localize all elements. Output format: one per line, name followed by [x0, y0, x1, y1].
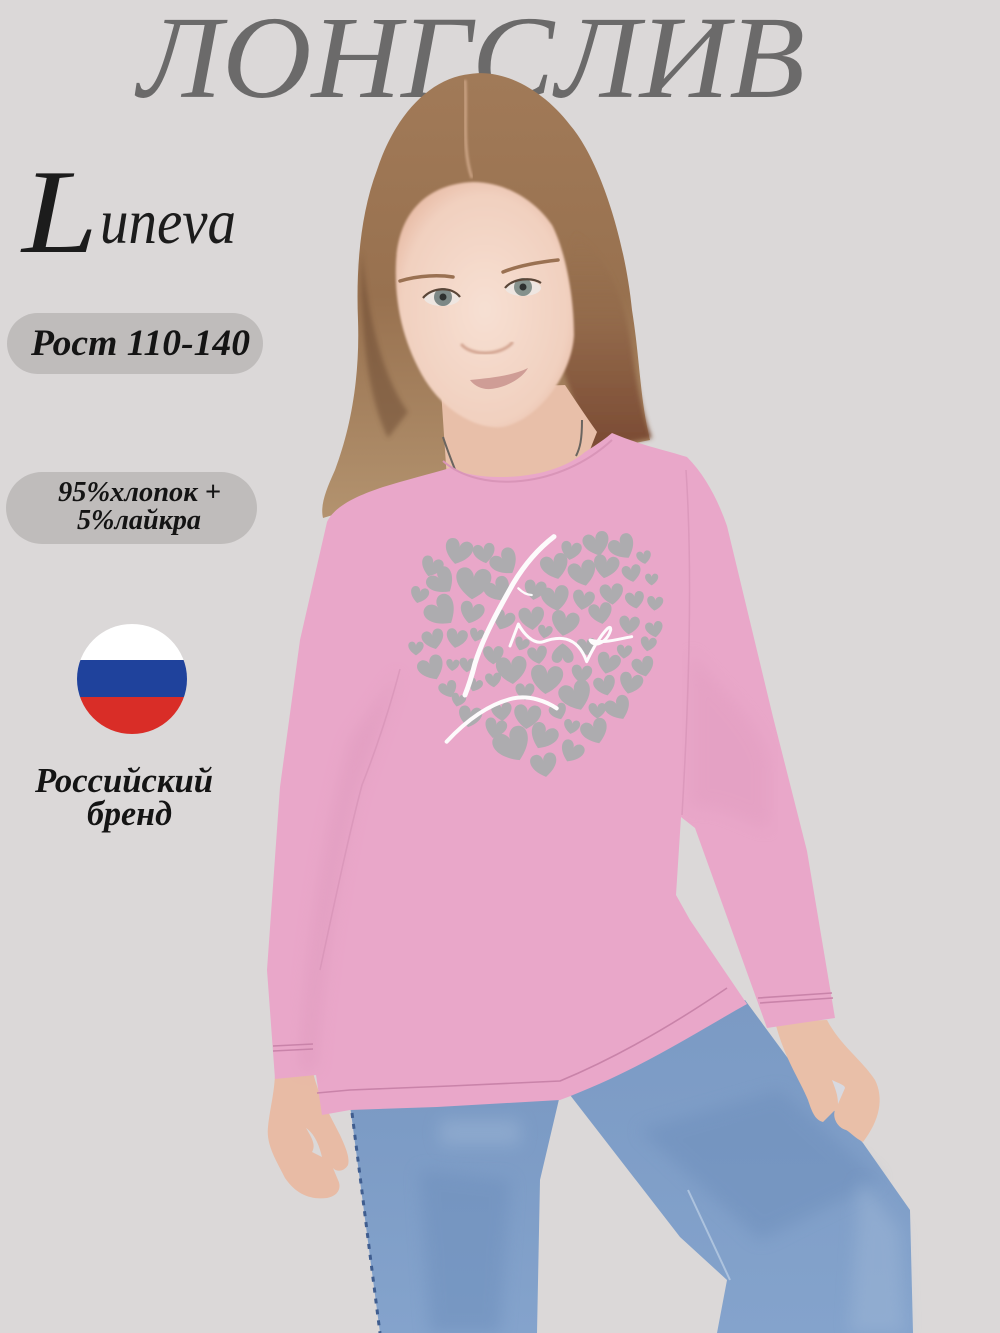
text: russian brand: Российский	[34, 761, 213, 800]
brand logo: L	[20, 145, 98, 278]
badge: height range	[7, 313, 263, 374]
brand logo: uneva	[100, 186, 236, 257]
badge: fabric composition: 5%лайкра	[77, 505, 201, 536]
collar rib	[443, 440, 612, 482]
badge: fabric composition	[6, 472, 257, 544]
brand logo	[20, 145, 236, 278]
neck	[441, 385, 597, 480]
icon: russian flag	[77, 624, 187, 734]
mouth	[470, 368, 528, 389]
badge: height range: Рост 110-140	[30, 323, 250, 364]
hand: left	[268, 1072, 349, 1198]
text: russian brand	[34, 761, 213, 833]
badge: fabric composition: 95%хлопок +	[58, 477, 221, 508]
stitching	[273, 988, 833, 1093]
white script stroke	[447, 537, 632, 742]
eyebrows	[400, 260, 558, 281]
hair	[322, 73, 652, 518]
hand: right	[775, 1020, 880, 1142]
necklace	[443, 420, 582, 472]
fold shading	[300, 669, 400, 1070]
face	[396, 182, 574, 427]
text: russian brand: бренд	[87, 794, 172, 833]
longsleeve shirt	[267, 433, 835, 1115]
glitter hearts	[408, 530, 664, 779]
photo illustration: girl	[267, 73, 913, 1333]
nose	[462, 343, 512, 353]
jeans	[350, 1000, 913, 1333]
heart print	[408, 530, 664, 779]
eyes	[423, 278, 541, 306]
